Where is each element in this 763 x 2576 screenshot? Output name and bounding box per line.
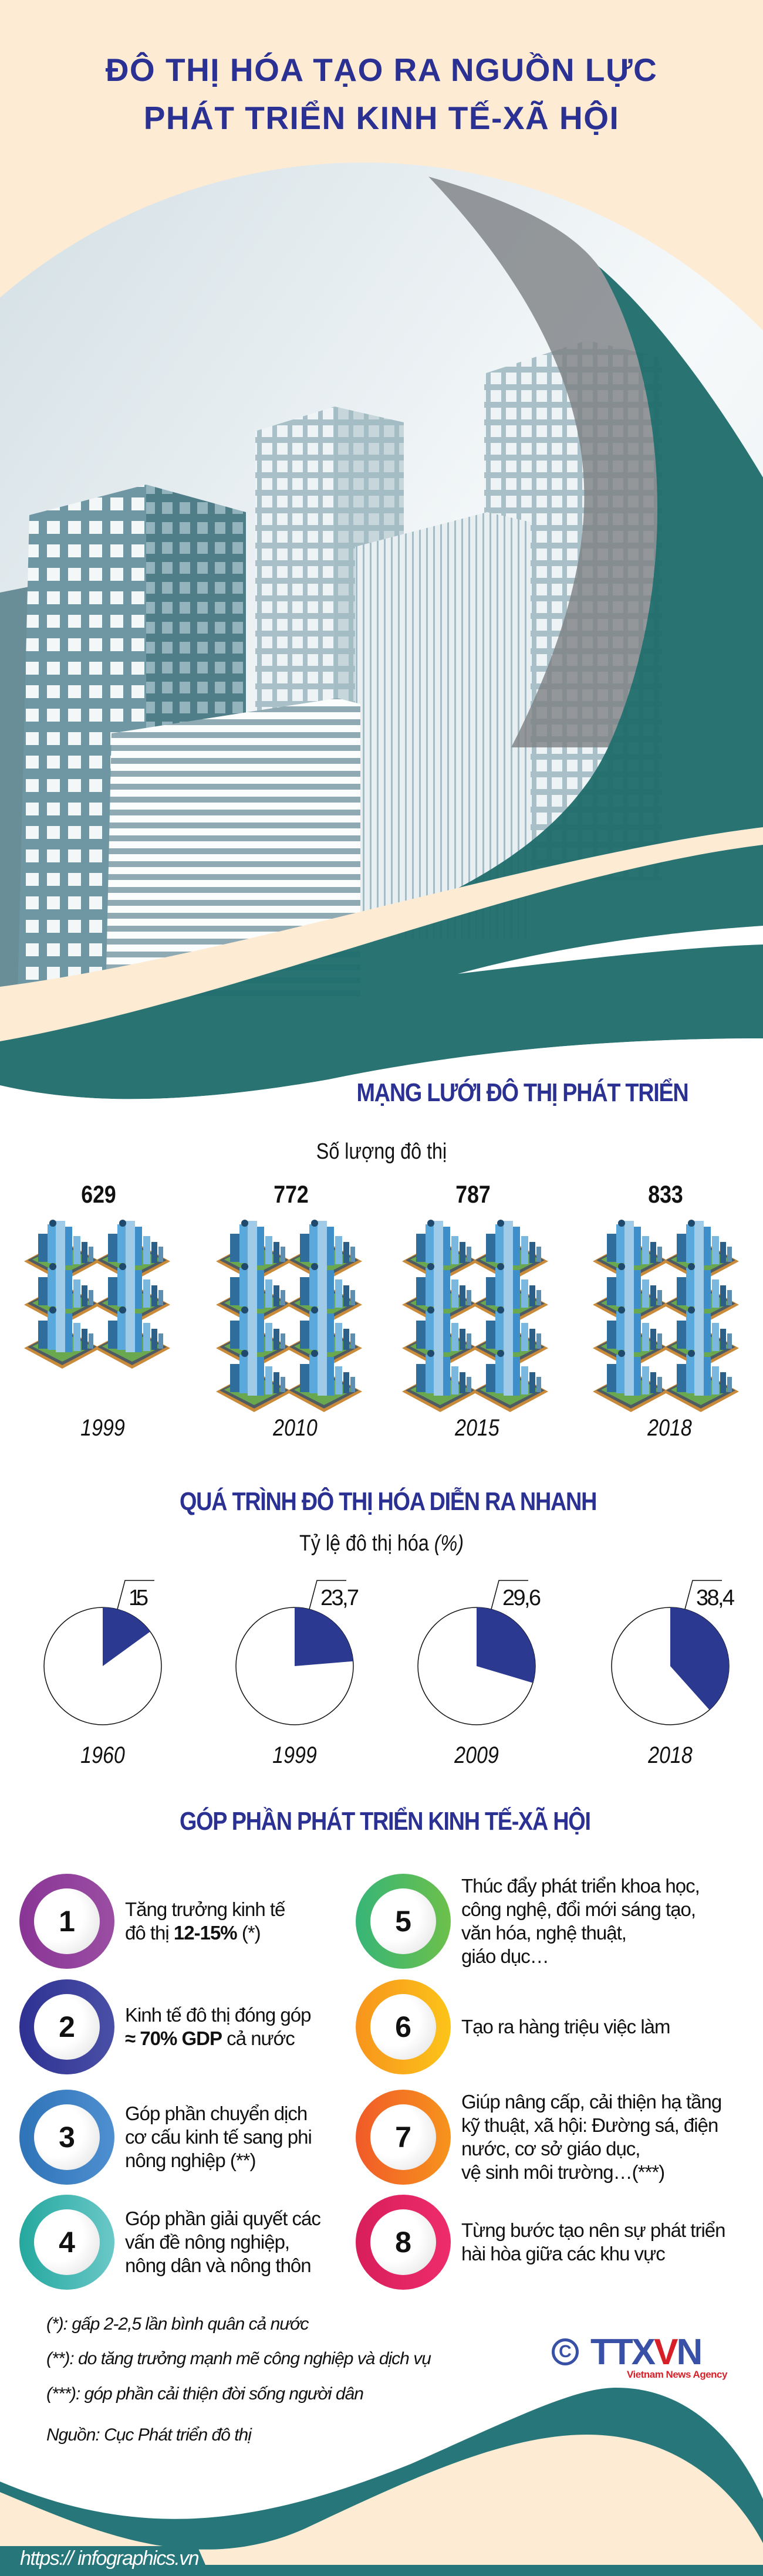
- item 5: Thúc đẩy phát triển khoa học,: [461, 1875, 700, 1897]
- item 2: Kinh tế đô thị đóng góp: [125, 2004, 310, 2026]
- item 6: 6: [395, 2010, 411, 2043]
- title: ĐÔ THỊ HÓA TẠO RA NGUỒN LỰC: [106, 52, 657, 88]
- item 5: công nghệ, đổi mới sáng tạo,: [461, 1898, 696, 1920]
- item 1: 1: [59, 1905, 75, 1938]
- years: city counts: 2010: [273, 1415, 318, 1441]
- item 1: [19, 1874, 285, 1969]
- logo: TTXVN: [552, 2332, 728, 2380]
- item 2: [19, 1979, 311, 2074]
- years: city counts: 2018: [647, 1415, 692, 1441]
- white sweep: [458, 926, 763, 974]
- logo: TTXVN: C: [559, 2342, 572, 2361]
- cream wave band: [0, 827, 763, 1041]
- item 5: giáo dục…: [461, 1945, 549, 1967]
- top hero artwork: [0, 0, 763, 1099]
- pie charts: 38,4: [696, 1586, 735, 1610]
- list: contributions: [19, 1874, 725, 2290]
- item 8: [356, 2195, 725, 2290]
- city counts: [81, 1180, 683, 1208]
- city counts: 772: [274, 1180, 309, 1208]
- photo circle with buildings: [0, 163, 763, 1099]
- item 1: Tăng trưởng kinh tế: [125, 1898, 285, 1920]
- footer url: https:// infographics.vn: [20, 2547, 198, 2570]
- item 7: vệ sinh môi trường…(***): [461, 2161, 664, 2183]
- bottom wave: [0, 2388, 763, 2576]
- footnotes: (**): do tăng trưởng mạnh mẽ công nghiệp và dịch vụ: [46, 2349, 431, 2368]
- item 5: 5: [395, 1905, 411, 1938]
- item 7: kỹ thuật, xã hội: Đường sá, điện: [461, 2114, 718, 2136]
- years: pies: 1999: [272, 1742, 317, 1768]
- item 4: nông dân và nông thôn: [125, 2255, 311, 2276]
- item 7: nước, cơ sở giáo dục,: [461, 2138, 640, 2159]
- item 4: 4: [59, 2226, 75, 2259]
- item 5: [356, 1874, 700, 1969]
- logo: TTXVN: TTXVN: [590, 2332, 701, 2372]
- item 1: đô thị 12-15% (*): [125, 1922, 261, 1944]
- pie charts: [43, 1580, 735, 1725]
- years: city counts: 1999: [80, 1415, 125, 1441]
- item 8: hài hòa giữa các khu vực: [461, 2243, 665, 2264]
- gray arc band: [428, 177, 657, 747]
- years: pies: 2018: [648, 1742, 693, 1768]
- heading: contributions: GÓP PHẦN PHÁT TRIỂN KINH TẾ-XÃ HỘI: [180, 1807, 590, 1836]
- logo: TTXVN: Vietnam News Agency: [627, 2369, 727, 2380]
- title: PHÁT TRIỂN KINH TẾ-XÃ HỘI: [144, 100, 619, 136]
- item 4: Góp phần giải quyết các: [125, 2208, 320, 2229]
- heading: urbanization: QUÁ TRÌNH ĐÔ THỊ HÓA DIỄN RA NHANH: [180, 1487, 596, 1516]
- item 3: 3: [59, 2121, 75, 2154]
- teal sweep: [0, 266, 763, 1099]
- years: city counts: [80, 1415, 692, 1441]
- footnotes: (***): góp phần cải thiện đời sống người dân: [46, 2384, 363, 2404]
- item 7: 7: [395, 2121, 411, 2154]
- item 4: vấn đề nông nghiệp,: [125, 2231, 289, 2253]
- item 3: cơ cấu kinh tế sang phi: [125, 2126, 312, 2148]
- pie charts: 15: [129, 1586, 148, 1610]
- item 2: 2: [59, 2010, 75, 2043]
- years: city counts: 2015: [455, 1415, 499, 1441]
- years: pies: 2009: [454, 1742, 499, 1768]
- item 6: Tạo ra hàng triệu việc làm: [461, 2016, 670, 2037]
- item 8: Từng bước tạo nên sự phát triển: [461, 2219, 725, 2241]
- icon chart: number of cities: [24, 1220, 739, 1412]
- item 5: văn hóa, nghệ thuật,: [461, 1922, 626, 1944]
- item 3: nông nghiệp (**): [125, 2150, 256, 2171]
- pie charts: 23,7: [320, 1586, 359, 1610]
- item 7: Giúp nâng cấp, cải thiện hạ tầng: [461, 2091, 721, 2113]
- city counts: 787: [455, 1180, 491, 1208]
- item 4: [19, 2195, 320, 2290]
- years: pies: 1960: [80, 1742, 125, 1768]
- item 3: [19, 2090, 312, 2185]
- title: [106, 52, 657, 136]
- city counts: 629: [81, 1180, 116, 1208]
- item 2: ≈ 70% GDP cả nước: [125, 2027, 295, 2049]
- pie charts: 29,6: [502, 1586, 541, 1610]
- city counts: 833: [648, 1180, 683, 1208]
- footnotes: [46, 2314, 431, 2445]
- footnotes: (*): gấp 2-2,5 lần bình quân cả nước: [46, 2314, 308, 2334]
- footnotes: Nguồn: Cục Phát triển đô thị: [46, 2425, 251, 2445]
- years: pies: [80, 1742, 693, 1768]
- item 7: [356, 2090, 721, 2185]
- item 3: Góp phần chuyển dịch: [125, 2103, 307, 2124]
- item 8: 8: [395, 2226, 411, 2259]
- subtitle: rate: Tỷ lệ đô thị hóa (%): [299, 1531, 464, 1556]
- subtitle: count: Số lượng đô thị: [316, 1139, 447, 1164]
- heading: network: MẠNG LƯỚI ĐÔ THỊ PHÁT TRIỂN: [357, 1078, 688, 1107]
- item 6: [356, 1979, 670, 2074]
